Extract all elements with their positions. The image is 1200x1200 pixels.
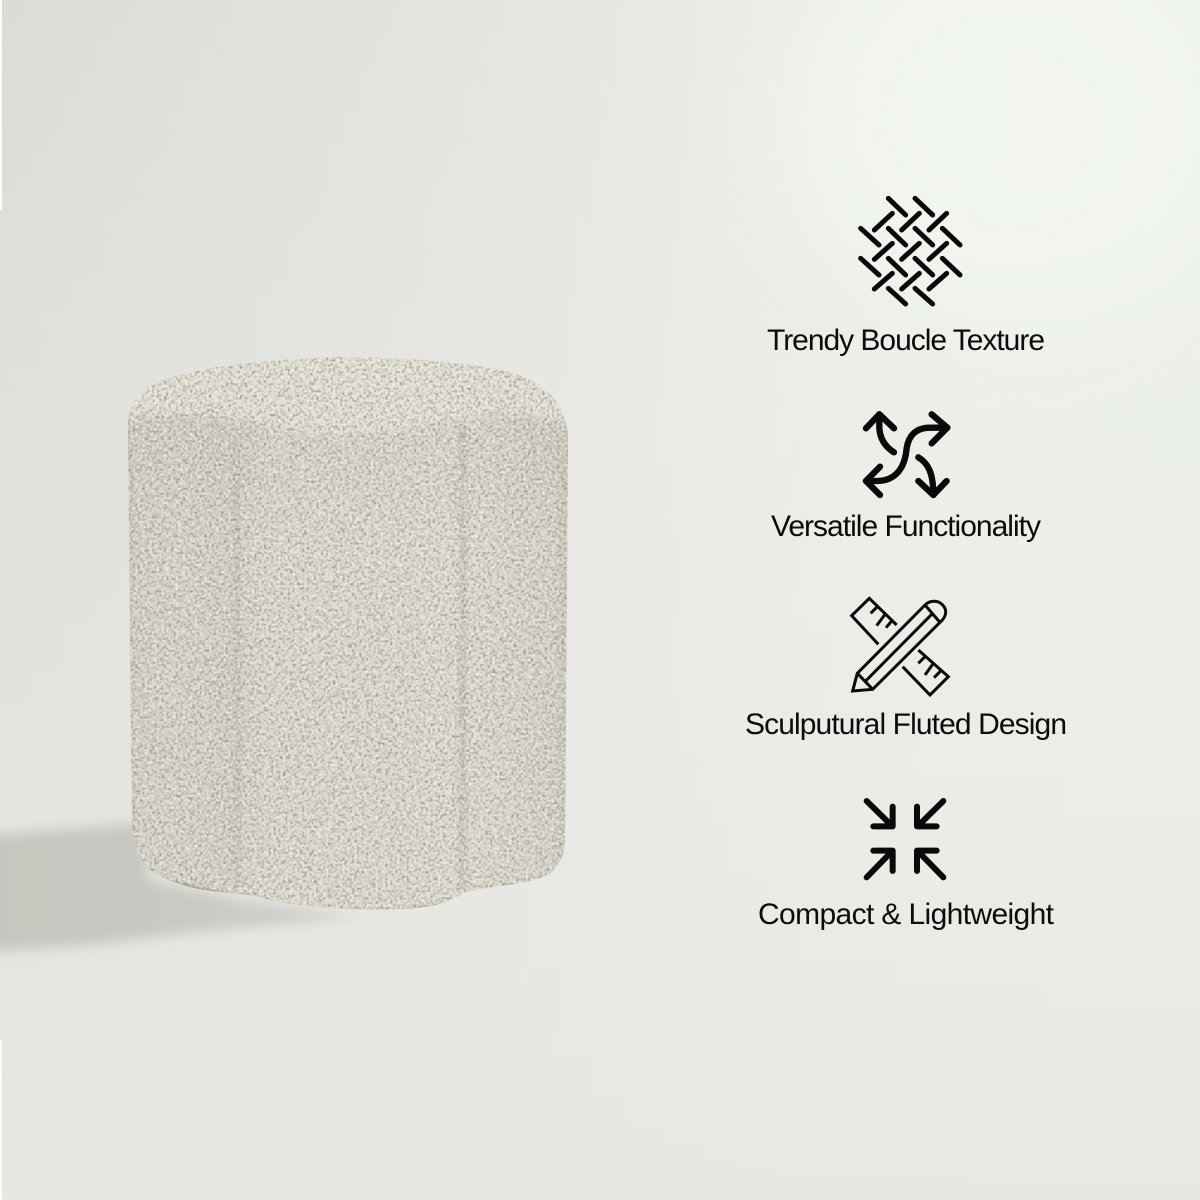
icon: crossing arrows <box>866 414 947 495</box>
label: Versatile Functionality <box>771 510 1041 543</box>
feature: Trendy Boucle Texture <box>767 198 1045 357</box>
icon: inward arrows <box>867 801 943 877</box>
label: Trendy Boucle Texture <box>767 324 1045 357</box>
pouf body and fabric <box>120 350 575 925</box>
feature: Versatile Functionality <box>771 414 1041 543</box>
label: Sculputural Fluted Design <box>745 708 1067 741</box>
label: Compact & Lightweight <box>758 898 1055 931</box>
icon: woven texture <box>861 198 960 304</box>
feature: Sculputural Fluted Design <box>745 598 1067 741</box>
cast shadow of the pouf <box>0 823 360 952</box>
pouf product photo <box>120 350 575 925</box>
feature: Compact & Lightweight <box>758 801 1055 931</box>
icon: pencil and ruler <box>852 598 948 695</box>
